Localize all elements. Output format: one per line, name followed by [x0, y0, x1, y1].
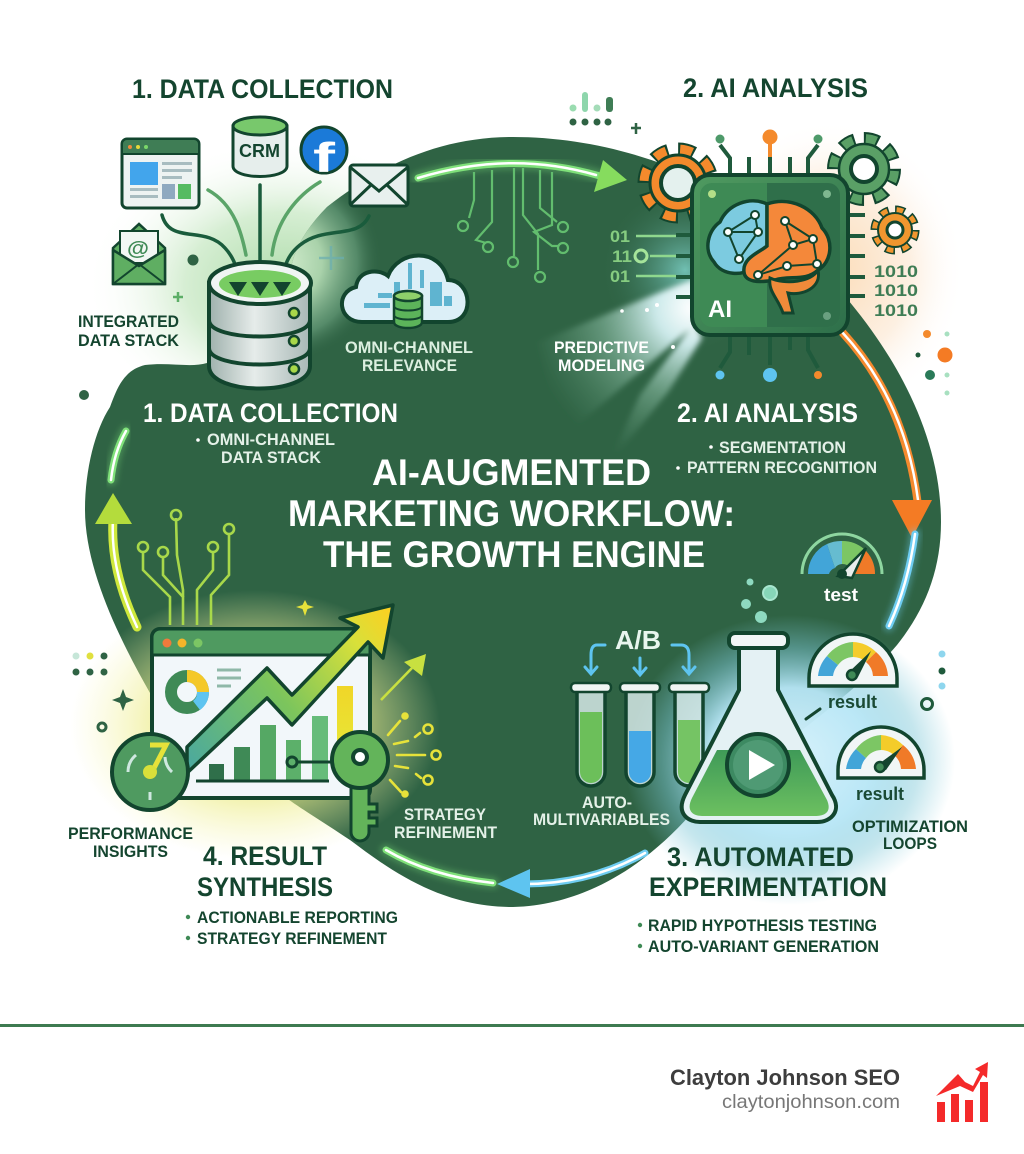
label: predictive modeling — [554, 338, 649, 375]
block: step 1 in disc: DATA STACK — [221, 448, 322, 467]
glow: results — [70, 590, 440, 860]
circuit terminals — [716, 130, 822, 382]
main title: THE GROWTH ENGINE — [323, 534, 705, 575]
footer brand text: Clayton Johnson SEO — [670, 1065, 900, 1090]
icon: red growth chart — [936, 1062, 988, 1122]
AI chip — [692, 175, 848, 335]
glow: AI analysis backdrop — [695, 120, 965, 420]
arrow: experimentation to synthesis — [497, 853, 645, 898]
arrows into database — [162, 182, 369, 288]
icon: facebook: f — [313, 134, 337, 181]
block: step 4: SYNTHESIS — [197, 872, 333, 902]
circuit: lower left — [138, 510, 234, 625]
icon: cloud with data — [342, 256, 468, 328]
arrow: experimentation loop — [889, 534, 915, 626]
gauge: result 1 — [809, 634, 897, 712]
arrow: short segment — [111, 431, 126, 480]
central dark green disc — [85, 137, 941, 907]
decorative dots: left — [72, 652, 134, 731]
block: step 2 in disc — [676, 398, 877, 477]
gauge: test — [802, 534, 882, 605]
arrow: synthesis to collection — [95, 493, 137, 627]
binary right — [874, 262, 918, 320]
circuit: top arc — [458, 168, 568, 282]
label: result: result — [856, 784, 904, 804]
block: step 4: STRATEGY REFINEMENT — [197, 929, 388, 948]
block: step 1 in disc: OMNI-CHANNEL — [207, 430, 335, 449]
block: step 2 in disc: SEGMENTATION — [719, 438, 846, 457]
icon: green envelope with at sign — [113, 224, 165, 284]
binary right: 1010 — [874, 301, 918, 320]
footer brand text: claytonjohnson.com — [722, 1091, 900, 1113]
main title — [288, 452, 735, 575]
test tube 1 — [571, 683, 611, 786]
label: strategy refinement: REFINEMENT — [394, 823, 498, 842]
binary left: 01 — [610, 227, 630, 246]
block: step 4: 4. RESULT — [203, 841, 327, 871]
sparkle — [296, 600, 314, 616]
label: CRM: CRM — [239, 141, 280, 161]
icon: website window — [122, 139, 199, 208]
label: integrated data stack: DATA STACK — [78, 331, 180, 350]
growth arrow — [187, 605, 393, 773]
binary left: 01 — [610, 267, 630, 286]
block: step 3: 3. AUTOMATED — [667, 842, 854, 872]
light rays from chip — [538, 278, 702, 468]
glow: fade on disc upper left — [292, 196, 370, 345]
label: omni-channel relevance: OMNI-CHANNEL — [345, 338, 473, 357]
icon: database stack — [209, 262, 311, 388]
key — [287, 732, 388, 841]
small growth arrow — [381, 654, 426, 700]
label: performance insights: PERFORMANCE — [68, 824, 193, 843]
test tube 3 — [669, 683, 709, 786]
block: step 3: EXPERIMENTATION — [649, 872, 887, 902]
A/B arrows — [585, 645, 695, 675]
dashboard window — [152, 629, 370, 798]
main title: AI-AUGMENTED — [372, 452, 651, 493]
binary right: 1010 — [874, 281, 918, 300]
label: auto-multivariables: MULTIVARIABLES — [533, 810, 670, 829]
icon: facebook — [301, 127, 347, 181]
block: step 1 in disc — [143, 398, 398, 467]
label: integrated data stack — [78, 312, 180, 350]
flask — [682, 633, 836, 822]
decorative dots: lower right — [922, 650, 946, 710]
label: integrated data stack: INTEGRATED — [78, 312, 179, 331]
block: step 3: AUTO-VARIANT GENERATION — [648, 937, 879, 956]
label: predictive modeling: MODELING — [558, 356, 645, 375]
label: A/B: A/B — [615, 625, 661, 655]
binary left — [610, 227, 676, 286]
sparkle dots in rays — [620, 303, 675, 349]
label: auto-multivariables: AUTO- — [582, 793, 632, 812]
glow: experiment — [625, 615, 955, 905]
icon: green envelope with at sign: @ — [127, 238, 149, 260]
block: step 4 — [186, 841, 398, 948]
label: AI: AI — [708, 296, 732, 323]
test tube 2 — [620, 683, 660, 786]
gauge: result 2 — [838, 727, 924, 804]
bubbles — [741, 578, 777, 623]
label: test: test — [824, 585, 858, 605]
glow: chip side teal — [600, 185, 770, 355]
top heading: AI analysis: 2. AI ANALYSIS — [683, 73, 868, 103]
block: step 1 in disc: 1. DATA COLLECTION — [143, 398, 398, 428]
arrow: synthesis curve — [386, 850, 493, 883]
gear: orange large — [645, 150, 711, 216]
main title: MARKETING WORKFLOW: — [288, 493, 735, 534]
label: performance insights — [68, 824, 193, 861]
label: performance insights: INSIGHTS — [93, 842, 168, 861]
label: optimization loops: OPTIMIZATION — [852, 817, 968, 836]
bar chart — [196, 686, 353, 781]
footer rule — [0, 1024, 1024, 1027]
block: step 4: ACTIONABLE REPORTING — [197, 908, 398, 927]
arrow: collection to analysis — [418, 160, 627, 192]
cycle arrows — [95, 160, 932, 898]
label: optimization loops — [852, 817, 968, 853]
icon: CRM cylinder — [233, 117, 287, 176]
label: strategy refinement: STRATEGY — [404, 805, 487, 824]
rays around key — [388, 714, 440, 796]
top heading: data collection: 1. DATA COLLECTION — [132, 74, 393, 104]
block: step 2 in disc: 2. AI ANALYSIS — [677, 398, 858, 428]
arrow: analysis to experimentation — [842, 332, 932, 538]
decorative dots: right — [916, 330, 952, 396]
donut chart — [171, 670, 209, 710]
block: step 2 in disc: PATTERN RECOGNITION — [687, 458, 877, 477]
block: step 3: RAPID HYPOTHESIS TESTING — [648, 916, 877, 935]
gauge circle — [112, 734, 188, 810]
brain — [708, 201, 830, 313]
gear: orange small — [875, 210, 915, 250]
block: step 3 — [638, 842, 887, 956]
label: optimization loops: LOOPS — [883, 834, 937, 853]
label: omni-channel relevance — [345, 338, 473, 375]
label: result: result — [828, 692, 877, 712]
label: predictive modeling: PREDICTIVE — [554, 338, 649, 357]
chip traces — [676, 134, 865, 368]
decorative dots: upper middle — [570, 92, 641, 134]
decorative sparkle and dots, data side — [79, 246, 344, 400]
gear: green large — [834, 139, 894, 199]
connector tick — [806, 709, 820, 719]
label: auto-multivariables — [533, 793, 670, 829]
binary right: 1010 — [874, 262, 918, 281]
icon: mail envelope — [350, 165, 408, 206]
binary left: 11 — [612, 247, 632, 266]
label: strategy refinement — [394, 805, 498, 842]
glow: data collection backdrop — [85, 140, 485, 430]
footer brand text — [670, 1065, 900, 1113]
label: omni-channel relevance: RELEVANCE — [362, 356, 457, 375]
